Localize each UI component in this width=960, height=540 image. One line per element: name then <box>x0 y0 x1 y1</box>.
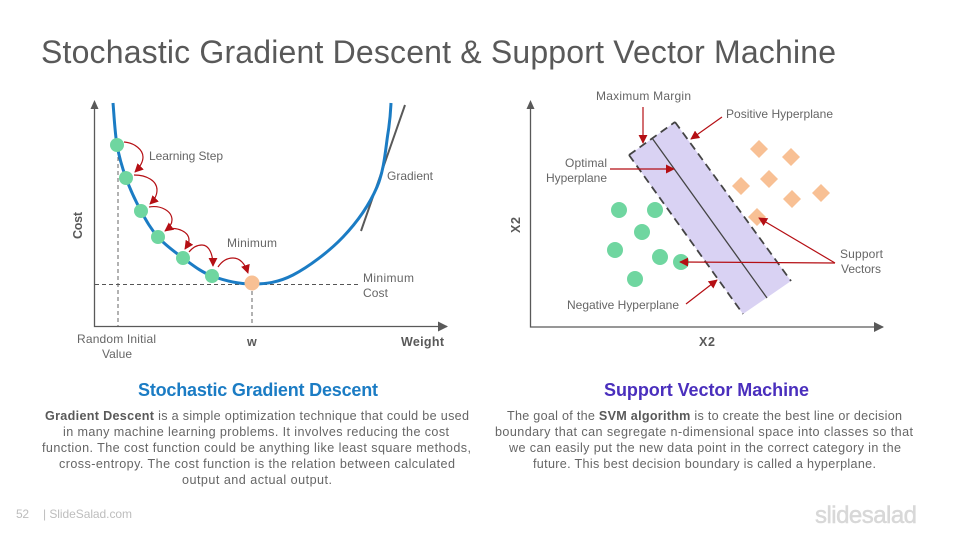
text block: gradient descent description: function. The cost function could be anything like least square methods, <box>42 441 471 455</box>
axes <box>94 102 447 326</box>
chart labels: Value <box>102 347 132 361</box>
gradient tangent line <box>361 105 405 231</box>
text block: svm description: we can easily put the new data point in the correct category in the <box>508 441 901 455</box>
text block: gradient descent description <box>42 409 471 487</box>
chart labels: Hyperplane <box>546 171 607 185</box>
y axis arrowhead <box>90 100 98 109</box>
page number: 52 <box>16 507 29 521</box>
title: Stochastic Gradient Descent & Support Vector Machine <box>41 34 836 70</box>
chart labels: Random Initial <box>77 332 156 346</box>
chart labels: Positive Hyperplane <box>726 107 833 121</box>
optimal hyperplane <box>652 138 767 298</box>
hyperplane dashed edges <box>629 122 791 314</box>
chart: support vector machine <box>509 89 884 349</box>
text block: svm description: future. This best decision boundary is called a hyperplane. <box>533 457 876 471</box>
minimum point <box>244 276 260 290</box>
chart labels: Weight <box>401 335 445 349</box>
logo wordmark: slidesalad <box>815 502 917 529</box>
chart labels: w <box>246 335 257 349</box>
axes <box>530 102 883 327</box>
dashed guide lines <box>95 150 358 326</box>
chart: gradient descent <box>71 100 447 361</box>
chart labels <box>509 89 884 349</box>
text block: svm description: The goal of the SVM algorithm is to create the best line or decision <box>507 409 902 423</box>
positive class points <box>732 140 830 226</box>
chart labels: X2 <box>509 217 523 233</box>
chart labels: Gradient <box>387 169 434 183</box>
descent points <box>110 138 219 283</box>
chart labels: X2 <box>699 335 715 349</box>
chart labels: Vectors <box>841 262 881 276</box>
chart labels: Support <box>840 247 884 261</box>
chart labels: Cost <box>363 286 389 300</box>
text block: gradient descent description: output and actual output. <box>182 473 332 487</box>
heading: stochastic gradient descent: Stochastic Gradient Descent <box>138 380 378 400</box>
chart labels: Optimal <box>565 156 607 170</box>
text block: gradient descent description: in many machine learning problems. It involves reducing the cost <box>63 425 450 439</box>
footer site name: | SlideSalad.com <box>43 507 132 521</box>
chart labels: Maximum Margin <box>596 89 691 103</box>
chart labels: Cost <box>71 211 85 239</box>
learning step arrows <box>124 142 248 273</box>
text block: svm description: boundary that can segregate n-dimensional space into classes so that <box>495 425 914 439</box>
cost curve <box>113 103 391 284</box>
margin band <box>629 122 791 314</box>
callout arrows <box>610 107 835 304</box>
chart labels <box>71 149 445 361</box>
chart labels: Minimum <box>363 271 414 285</box>
y axis arrowhead <box>526 100 534 109</box>
text block: gradient descent description: cross-entropy. The cost function is the relation between calculated <box>59 457 455 471</box>
text block: svm description <box>495 409 914 471</box>
chart labels: Negative Hyperplane <box>567 298 679 312</box>
heading: support vector machine: Support Vector Machine <box>604 380 809 400</box>
chart labels: Minimum <box>227 236 277 250</box>
text block: gradient descent description: Gradient Descent is a simple optimization technique that could be used <box>45 409 469 423</box>
negative class points <box>607 202 689 287</box>
chart labels: Learning Step <box>149 149 223 163</box>
